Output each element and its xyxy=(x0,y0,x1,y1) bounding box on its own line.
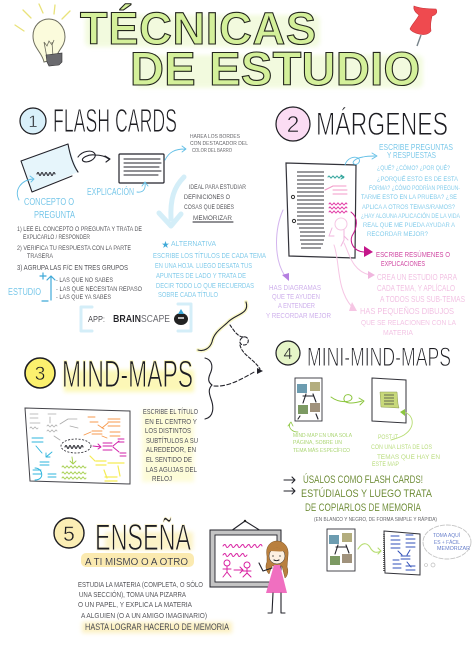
colour map copy xyxy=(327,529,355,571)
note: borders xyxy=(190,134,248,154)
cloud note: MEMORIZAR xyxy=(437,546,470,552)
app: brainscape: APP: xyxy=(88,315,105,324)
arrow: to notebook xyxy=(358,544,381,554)
text: questions and answers: Y RESPUESTAS xyxy=(387,151,436,160)
steps list: 3) AGRUPA LAS F/C EN TRES GRUPOS xyxy=(17,263,128,272)
arrow: card flip xyxy=(78,151,110,162)
text: post-it list: POST-IT xyxy=(378,435,398,441)
post-it page xyxy=(372,378,412,440)
text: use as flash cards: DE COPIARLOS DE MEMORIA xyxy=(305,502,421,514)
text: mind map instructions: ALREDEDOR, EN xyxy=(146,445,196,454)
text: mind map instructions: LOS DISTINTOS xyxy=(145,426,191,435)
note: borders: COLOR DEL BARRO xyxy=(192,148,232,154)
text: use as flash cards: ÚSALOS COMO FLASH CARDS! xyxy=(303,473,423,486)
text: diagrams xyxy=(266,210,331,320)
text: summaries: ESCRIBE RESÚMENES O xyxy=(376,250,450,259)
heading: márgenes: 2 xyxy=(287,111,299,137)
text: summaries: EXPLICACIONES xyxy=(381,261,425,268)
text: questions and answers xyxy=(361,143,461,238)
panel: enseña xyxy=(54,517,288,633)
panel: flash cards xyxy=(8,102,266,331)
label: concept or question: CONCEPTO O xyxy=(24,197,74,208)
steps list: - LAS QUE NECESITAN REPASO xyxy=(56,286,142,293)
notebook copy xyxy=(384,531,420,575)
text: questions and answers: ESCRIBE PREGUNTAS xyxy=(379,143,453,152)
callout: alternative: EN UNA HOJA. LUEGO DESATA TUS xyxy=(155,263,252,270)
connector: brace and dashed arrows xyxy=(198,302,263,419)
teaching instructions: O UN PAPEL, Y EXPLICA LA MATERIA xyxy=(78,602,192,609)
callout: alternative: DECIR TODO LO QUE RECUERDAS xyxy=(156,283,254,290)
teaching instructions: ESTUDIA LA MATERIA (COMPLETA, O SÓLO xyxy=(78,580,203,589)
label: concept or question: PREGUNTA xyxy=(34,210,75,221)
label: explanation: EXPLICACIÓN xyxy=(87,185,134,198)
subheading xyxy=(81,553,194,568)
heading: mind-maps: MIND-MAPS xyxy=(62,354,193,396)
text: create an example xyxy=(344,243,465,304)
steps list: 2) VERIFICA TU RESPUESTA CON LA PARTE xyxy=(17,245,132,252)
text: diagrams: A ENTENDER xyxy=(278,301,315,310)
label: explanation xyxy=(87,182,148,198)
teaching instructions: UNA SECCIÓN), TOMA UNA PIZARRA xyxy=(79,590,186,599)
mini map page xyxy=(295,378,322,421)
text: create an example: CADA TEMA, Y APLÍCALO xyxy=(377,284,455,293)
text: small drawings: MATERIA xyxy=(383,328,413,337)
note: ideal for: IDEAL PARA ESTUDIAR xyxy=(189,184,246,191)
teaching instructions: HASTA LOGRAR HACERLO DE MEMORIA xyxy=(85,622,230,633)
heading: enseña xyxy=(54,517,193,558)
cloud note xyxy=(423,525,471,567)
text: mind map on a single page: TEMA MÁS ESPECÍFICO xyxy=(293,447,351,454)
title xyxy=(80,3,423,95)
heading: mind-maps xyxy=(25,354,194,396)
text: questions and answers: REAL QUE ME PUEDA AYUDAR A xyxy=(363,222,456,229)
steps list: TRASERA xyxy=(27,253,54,260)
front card xyxy=(21,144,78,192)
text: mind map on a single page: MIND-MAP EN UNA SOLA xyxy=(293,433,352,439)
callout: alternative: APUNTES DE LADO Y TRATA DE xyxy=(156,273,246,280)
note: borders: HAREA LOS BORDES xyxy=(190,134,241,140)
teaching instructions: A ALGUIEN (O A UN AMIGO IMAGINARIO) xyxy=(81,613,207,620)
cloud note: TOMA AQUÍ xyxy=(433,532,460,539)
callout: alternative: SOBRE CADA TÍTULO xyxy=(158,290,218,299)
text: mind map instructions: LAS AGUJAS DEL xyxy=(146,465,197,474)
teaching instructions xyxy=(78,580,232,633)
study priority arrow xyxy=(8,273,55,301)
note: ideal for: MEMORIZAR xyxy=(193,215,232,222)
app: brainscape xyxy=(81,304,191,331)
title: DE ESTUDIO xyxy=(130,42,420,95)
note: ideal for: COSAS QUE DEBES xyxy=(184,204,235,211)
text: mind map instructions xyxy=(142,407,198,483)
text: small drawings xyxy=(334,245,456,337)
arrow: to post-it xyxy=(331,395,364,405)
title: TÉCNICAS xyxy=(80,3,316,54)
arrow: to questions xyxy=(345,153,377,165)
text: questions and answers: TARME ESTO EN LA PRUEBA? ¿SE xyxy=(361,194,458,201)
document illustration xyxy=(286,163,356,258)
icon: red push pin xyxy=(410,6,437,46)
callout: alternative xyxy=(153,240,266,299)
app: brainscape: SCAPE xyxy=(141,314,170,325)
panel: márgenes xyxy=(266,106,465,337)
text: use as flash cards xyxy=(284,473,437,523)
text: diagrams: HAS DIAGRAMAS xyxy=(269,283,321,292)
text: questions and answers: APLICA A OTROS TEMAS/RAMOS? xyxy=(362,204,455,211)
text: post-it list: ESTE MAP xyxy=(372,462,399,468)
steps list: 1) LEE EL CONCEPTO O PREGUNTA Y TRATA DE xyxy=(17,226,143,233)
text: summaries xyxy=(351,212,450,268)
text: mind map on a single page xyxy=(288,422,352,454)
text: post-it list: TEMAS QUE HAY EN xyxy=(377,455,440,461)
text: mind map instructions: ESCRIBE EL TÍTULO xyxy=(143,407,198,416)
text: post-it list: CON UNA LISTA DE LOS xyxy=(371,445,432,451)
heading: enseña: 5 xyxy=(63,523,75,546)
text: questions and answers: ¿PORQUÉ ESTO ES DE ESTA xyxy=(377,174,459,183)
icon: light bulb xyxy=(15,4,70,66)
note: ideal for xyxy=(184,184,246,222)
whiteboard xyxy=(210,520,281,587)
steps list xyxy=(17,226,143,301)
text: create an example: CREA UN ESTUDIO PARA xyxy=(377,273,458,282)
arrow: big blue down xyxy=(159,177,184,226)
heading: flash cards xyxy=(20,102,177,139)
text: diagrams: Y RECORDAR MEJOR xyxy=(266,311,331,320)
text: questions and answers: ¿QUÉ? ¿CÓMO? ¿POR QUÉ? xyxy=(377,163,450,172)
text: use as flash cards: (EN BLANCO Y NEGRO, DE FORMA SIMPLE Y RÁPIDA) xyxy=(314,516,437,523)
text: use as flash cards: ESTÚDIALOS Y LUEGO TRATA xyxy=(301,487,433,500)
heading: mini-mind-maps: 4 xyxy=(284,346,293,363)
steps list: EXPLICARLO / RESPONDER xyxy=(23,234,90,241)
text: mind map on a single page: PÁGINA, SOBRE UN xyxy=(293,439,342,446)
steps list: - LAS QUE YA SABES xyxy=(56,294,112,301)
subheading: A TI MISMO O A OTRO xyxy=(85,557,188,568)
study priority arrow: ESTUDIO xyxy=(8,287,41,298)
back card xyxy=(119,154,164,183)
note: borders: CON DESTACADOR DEL xyxy=(190,141,248,147)
text: mind map instructions: RELOJ xyxy=(152,474,172,483)
text: mind map instructions: EN EL CENTRO Y xyxy=(145,417,197,426)
cloud note: ES + FÁCIL xyxy=(434,539,460,546)
text: small drawings: QUE SE RELACIONEN CON LA xyxy=(361,318,456,327)
heading: flash cards: 1 xyxy=(28,112,38,131)
text: mind map instructions: EL SENTIDO DE xyxy=(146,455,192,464)
label: concept or question xyxy=(17,176,75,221)
note: ideal for: DEFINICIONES O xyxy=(184,194,230,201)
text: post-it list xyxy=(371,435,440,468)
callout: alternative: ALTERNATIVA xyxy=(171,241,216,248)
heading: mind-maps: 3 xyxy=(35,364,45,385)
text: diagrams: QUE TE AYUDEN xyxy=(272,292,320,301)
heading: márgenes xyxy=(276,106,448,142)
heading: flash cards: FLASH CARDS xyxy=(53,102,177,139)
mind map illustration xyxy=(25,408,130,484)
text: questions and answers: RECORDAR MEJOR? xyxy=(367,231,428,238)
text: mind map instructions: SUBTÍTULOS A SU xyxy=(146,436,198,445)
panel: mind-maps xyxy=(25,354,198,484)
heading: enseña: ENSEÑA xyxy=(95,517,191,558)
steps list: - LAS QUE NO SABES xyxy=(56,277,114,284)
arrow: to border note xyxy=(165,146,186,160)
callout: alternative: ESCRIBE LOS TÍTULOS DE CADA TEMA xyxy=(153,251,266,260)
text: small drawings: HAS PEQUEÑOS DIBUJOS xyxy=(360,306,454,316)
app: brainscape: BRAIN xyxy=(113,314,141,325)
callout: alternative: ★ xyxy=(161,240,170,251)
panel: mini-mind-maps xyxy=(276,341,471,575)
teacher character xyxy=(259,541,288,613)
